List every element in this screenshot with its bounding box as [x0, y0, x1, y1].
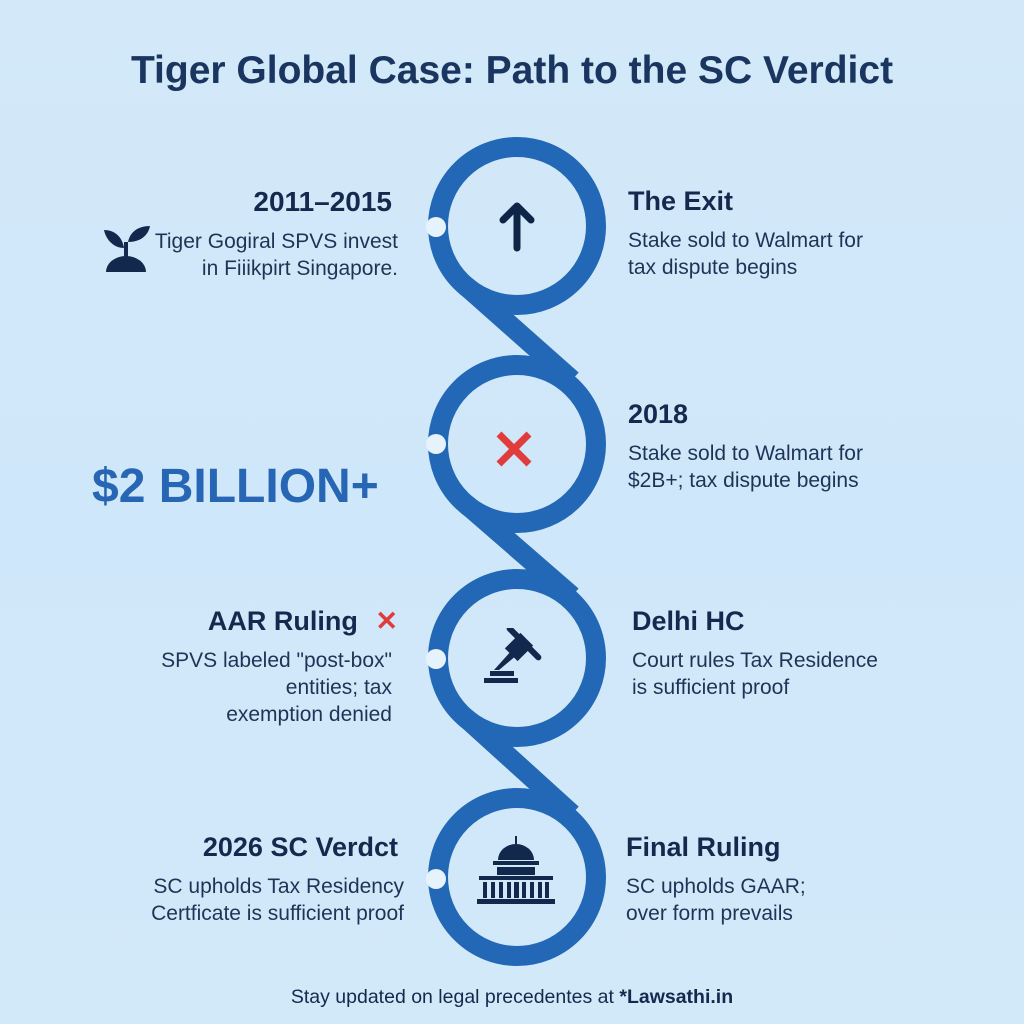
left block: 2026 SC Verdict: 2026 SC Verdct [203, 832, 398, 862]
left block: 2026 SC Verdict: Certficate is sufficient proof [151, 902, 404, 925]
right block: 2018: $2B+; tax dispute begins [628, 469, 859, 492]
right block: 2018: Stake sold to Walmart for [628, 442, 863, 465]
icon: gavel [484, 628, 542, 683]
right block: Delhi HC: is sufficient proof [632, 676, 789, 699]
right block: The Exit: tax dispute begins [628, 256, 797, 279]
icon: red x [496, 432, 532, 466]
right block: The Exit: Stake sold to Walmart for [628, 229, 863, 252]
title: Tiger Global Case: Path to the SC Verdict [131, 49, 893, 92]
right block: 2018: 2018 [628, 399, 688, 429]
text: Tiger Gogiral SPVS invest [155, 230, 398, 253]
right block: The Exit [628, 186, 863, 279]
right block: Final Ruling: over form prevails [626, 902, 793, 925]
left block: 2026 SC Verdict: SC upholds Tax Residency [153, 875, 404, 898]
left block: AAR Ruling: SPVS labeled "post-box" [161, 649, 392, 672]
left block 1 [155, 186, 398, 280]
icon: court building [477, 836, 555, 904]
left block: AAR Ruling: entities; tax [286, 676, 392, 699]
left block: AAR Ruling: AAR Ruling ✕ [208, 606, 398, 636]
left block: AAR Ruling [161, 606, 398, 726]
icon: sprout [104, 226, 150, 272]
text [155, 230, 398, 280]
right block: The Exit: The Exit [628, 186, 733, 216]
right block: Delhi HC: Delhi HC [632, 606, 745, 636]
left block: 2026 SC Verdict [151, 832, 404, 925]
left block: AAR Ruling: exemption denied [226, 703, 392, 726]
big number: $2 BILLION+ [92, 460, 379, 513]
right block: Delhi HC: Court rules Tax Residence [632, 649, 878, 672]
right block: Final Ruling [626, 832, 806, 925]
right block: Final Ruling: SC upholds GAAR; [626, 875, 806, 898]
icon: up arrow [500, 202, 534, 252]
right block: 2018 [628, 399, 863, 492]
text: in Fiiikpirt Singapore. [202, 257, 398, 280]
right block: Delhi HC [632, 606, 878, 699]
footer: Stay updated on legal precedentes at *Lawsathi.in [291, 986, 733, 1008]
right block: Final Ruling: Final Ruling [626, 832, 780, 862]
heading 2011-2015: 2011–2015 [253, 186, 392, 217]
